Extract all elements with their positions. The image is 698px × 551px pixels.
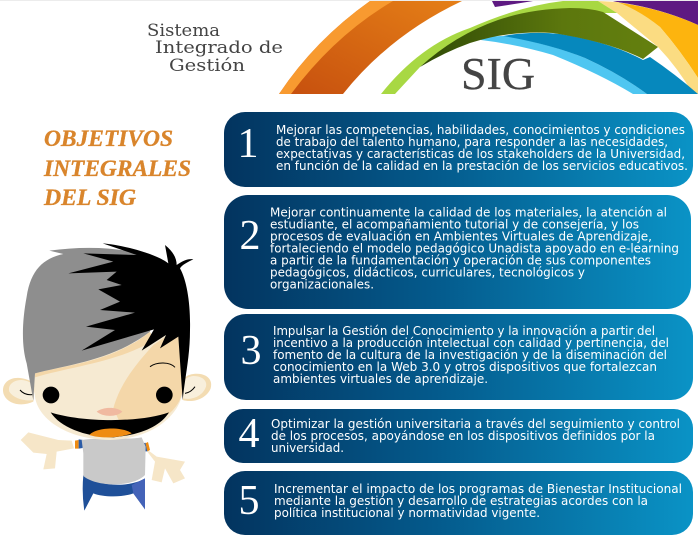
objective card 1: de trabajo del talento humano, para responder a las necesidades,: [276, 134, 668, 149]
objective card 2: procesos de evaluación en Ambientes Virtuales de Aprendizaje,: [270, 228, 652, 244]
pants: [83, 475, 145, 511]
objective card 1: Mejorar las competencias, habilidades, conocimientos y condiciones: [276, 122, 685, 137]
objective card 5: mediante la gestión y desarrollo de estrategias acordes con la: [274, 493, 648, 508]
tongue: [89, 429, 132, 437]
objective card 2: organizacionales.: [270, 276, 374, 292]
objective card 3: ambientes virtuales de aprendizaje.: [273, 371, 488, 386]
objective card 4: de los procesos, apoyándose en los dispositivos definidos por la: [271, 428, 655, 443]
arc: gold: [615, 2, 698, 78]
heading: Objetivos integrales del SIG: OBJETIVOS: [44, 126, 173, 151]
header title: Sistema Integrado de Gestión: Integrado de: [155, 38, 283, 58]
top edge line: [0, 0, 698, 1]
arc: pale yellow: [598, 1, 698, 94]
objective card 1: 1: [238, 121, 258, 167]
left arm: [21, 432, 74, 469]
arc: lime green: [381, 1, 617, 94]
header title: Sistema Integrado de Gestión: Gestión: [169, 56, 245, 76]
arc: light orange: [279, 1, 393, 94]
objective card 2: Mejorar continuamente la calidad de los materiales, la atención al: [270, 204, 667, 220]
objective card 5: 5: [238, 478, 260, 524]
objective card 4: [224, 409, 693, 463]
objective card 5: [224, 471, 693, 535]
left ear: [3, 378, 35, 404]
arc: purple: [492, 1, 698, 25]
objective card 1: expectativas y características de los stakeholders de la Universidad,: [276, 146, 685, 161]
shirt: [82, 437, 146, 484]
objective card 4: Optimizar la gestión universitaria a través del seguimiento y control: [271, 416, 680, 431]
objective card 1: [224, 112, 693, 187]
eyebrow: [150, 363, 175, 367]
face shade: [113, 336, 183, 430]
objective card 3: 3: [240, 328, 262, 374]
objective card 3: fomento de la cultura de la investigación y de la diseminación del: [273, 347, 667, 362]
objective card 1: en función de la calidad en la prestación de los servicios educativos.: [276, 158, 688, 173]
gray hair: [23, 248, 150, 401]
objective card 2: fortaleciendo el modelo pedagógico Unadista apoyado en e-learning: [270, 240, 679, 256]
heading: Objetivos integrales del SIG: [43, 126, 191, 210]
objective card 3: [224, 314, 693, 400]
face: [33, 330, 183, 440]
SIG logo text: SIG: [461, 48, 535, 99]
objective card 2: a partir de la fundamentación y operación de sus componentes: [270, 252, 651, 268]
eyes: [43, 387, 173, 403]
objective card 2: estudiante, el acompañamiento tutorial y de consejería, y los: [270, 216, 639, 232]
arc: dark green: [420, 8, 658, 67]
objective card 2: pedagógicos, didácticos, curriculares, tecnológicos y: [270, 264, 586, 280]
objective card 4: 4: [238, 411, 260, 457]
objective card 5: Incrementar el impacto de los programas de Bienestar Institucional: [274, 481, 682, 496]
heading: Objetivos integrales del SIG: DEL SIG: [43, 185, 136, 210]
arc: blue: [503, 33, 698, 94]
hair shadow on forehead: [35, 332, 154, 377]
cuffs: [75, 439, 150, 451]
right ear: [183, 374, 211, 401]
arc: light blue: [481, 36, 647, 94]
arc: orange: [279, 1, 462, 94]
header title: Sistema Integrado de Gestión: [147, 21, 283, 76]
objective card 4: universidad.: [271, 440, 344, 455]
nose: [97, 408, 122, 416]
objective card 3: incentivo a la producción intelectual con calidad y pertinencia, del: [273, 335, 669, 350]
header title: Sistema Integrado de Gestión: Sistema: [147, 21, 220, 41]
objective card 3: conocimiento en la Web 3.0 y otros dispositivos que fortalezcan: [273, 359, 657, 374]
objective card 2: 2: [240, 213, 260, 259]
header banner: rainbow arcs: [279, 1, 698, 94]
objective card 3: Impulsar la Gestión del Conocimiento y la innovación a partir del: [273, 323, 655, 338]
mouth: [51, 412, 169, 437]
cartoon character: [3, 243, 211, 511]
right arm: [143, 447, 185, 483]
objective card 2: [224, 195, 691, 309]
objective card 5: política institucional y normatividad vigente.: [274, 505, 540, 520]
black hair: [68, 243, 193, 400]
heading: Objetivos integrales del SIG: INTEGRALES: [43, 156, 191, 181]
